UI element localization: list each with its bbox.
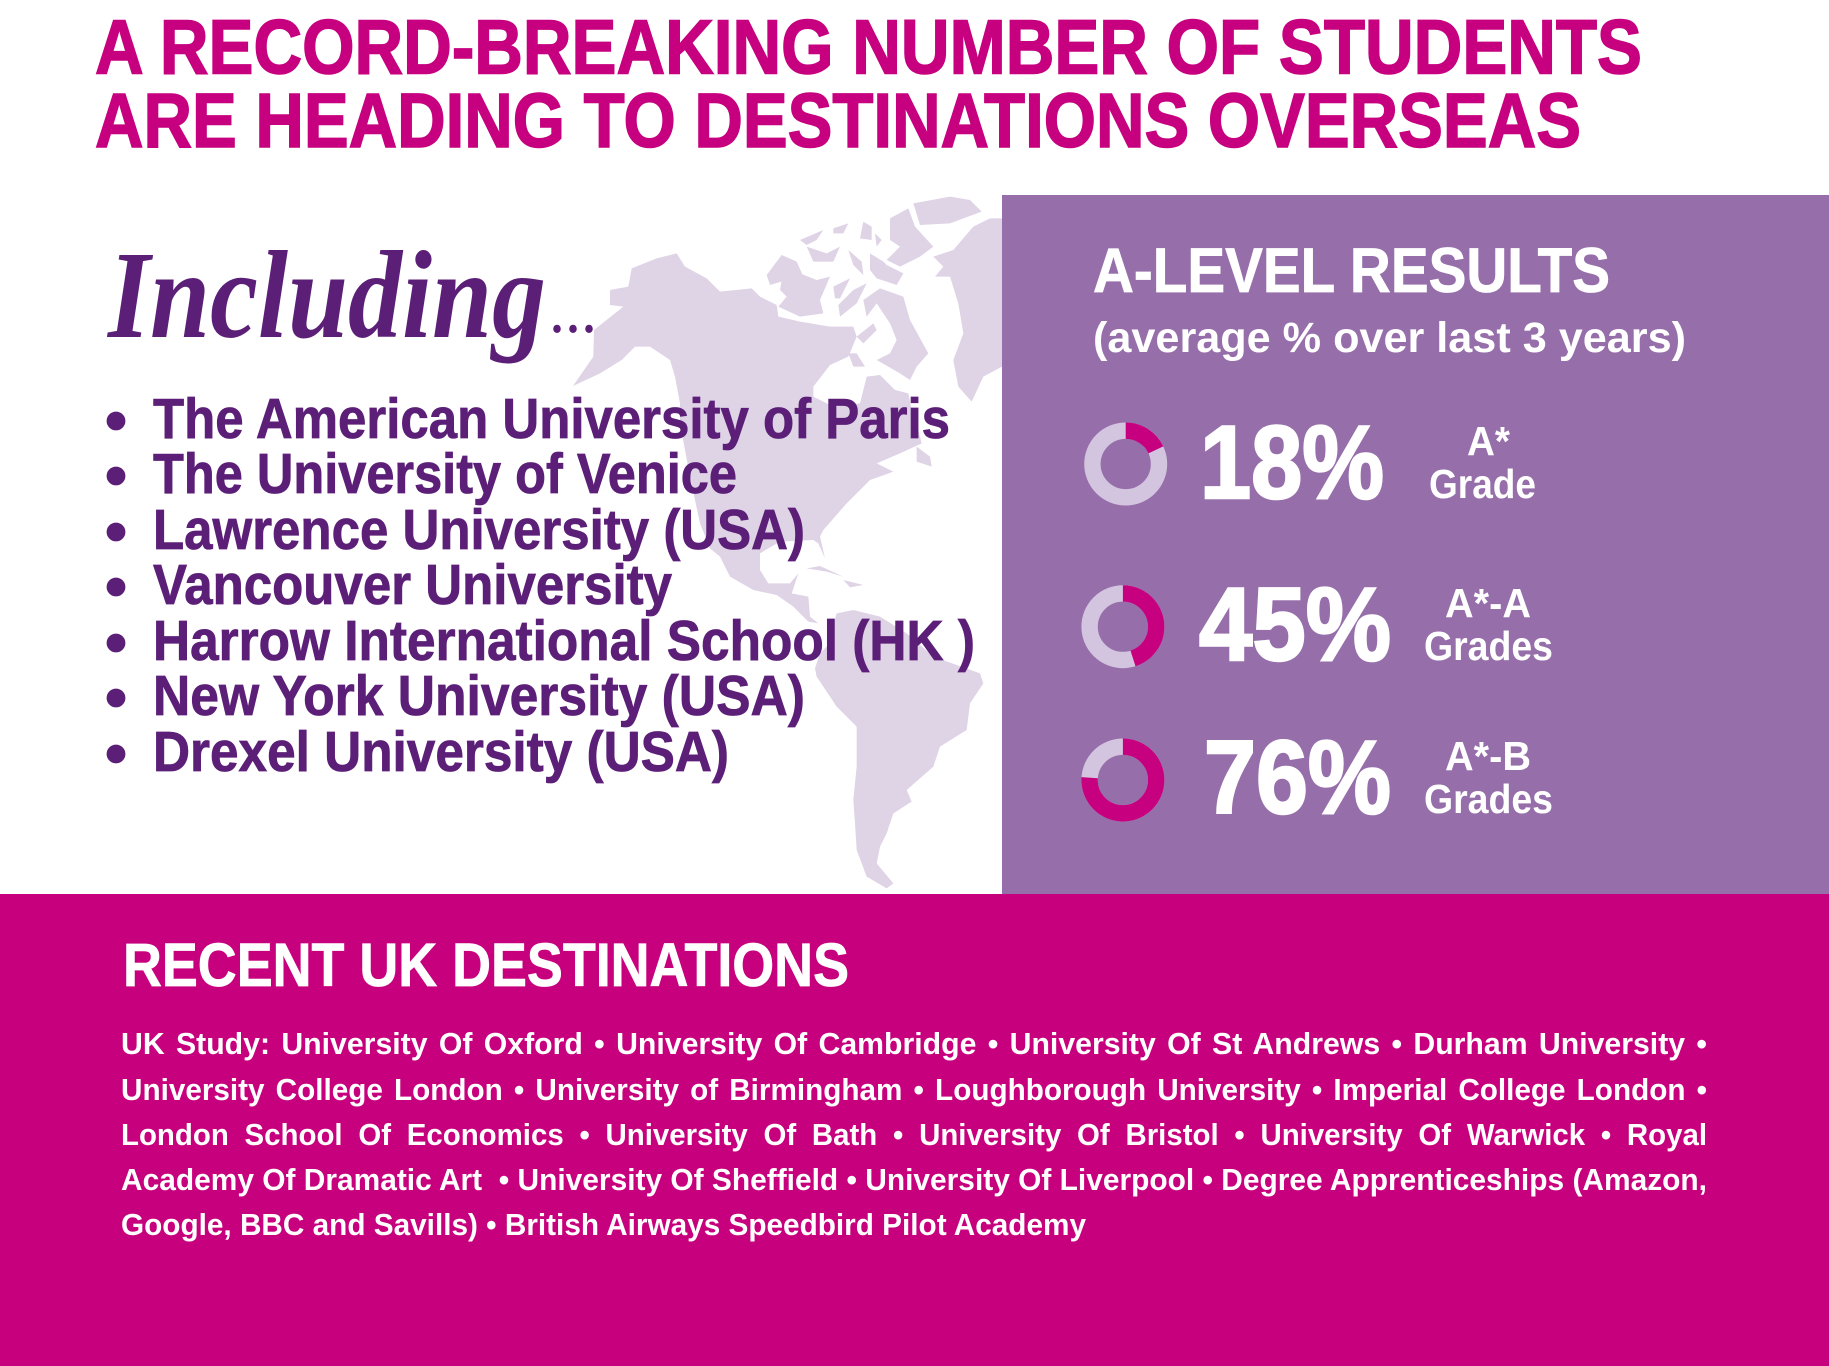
text block: UK destinations list: [121, 1026, 1707, 1242]
stat: 76% A*-B grades: Grades: [1424, 776, 1553, 822]
heading: recent UK destinations: RECENT UK DESTINATIONS: [123, 931, 849, 999]
panel: A-level results: [1002, 195, 1829, 894]
text block: UK destinations list: University College London • University of Birmingham • Loughborough University • Imperial College London •: [121, 1072, 1707, 1107]
stat: 76% A*-B grades: [1204, 720, 1553, 836]
list: overseas universities: Drexel University (USA): [153, 720, 729, 784]
title: A RECORD-BREAKING NUMBER OF STUDENTS: [95, 4, 1642, 90]
stat: 18% A* grade: A*: [1467, 418, 1510, 464]
stat: 18% A* grade: 18%: [1200, 405, 1384, 521]
heading: A-level results: (average % over last 3 years): [1093, 314, 1686, 362]
heading: Including: ...: [549, 271, 597, 348]
stat: 45% A*-A grades: 45%: [1199, 567, 1391, 683]
text block: UK destinations list: Google, BBC and Savills) • British Airways Speedbird Pilot Academy: [121, 1207, 1087, 1242]
title: ARE HEADING TO DESTINATIONS OVERSEAS: [95, 78, 1581, 164]
text block: UK destinations list: Academy Of Dramatic Art • University Of Sheffield • University Of Liverpool • Degree Apprenticeships (Amazon,: [121, 1162, 1707, 1197]
list: overseas universities: [107, 387, 975, 784]
stat: 76% A*-B grades: 76%: [1204, 720, 1391, 836]
stat: 18% A* grade: [1200, 405, 1536, 521]
donut: 18%: [1092, 431, 1159, 497]
heading: A-level results: A-LEVEL RESULTS: [1093, 236, 1610, 306]
stat: 76% A*-B grades: A*-B: [1445, 733, 1531, 779]
donut: 76%: [1090, 747, 1156, 813]
stat: 45% A*-A grades: Grades: [1424, 623, 1553, 669]
list: overseas universities: Harrow International School (HK ): [153, 609, 975, 673]
text block: UK destinations list: London School Of Economics • University Of Bath • University Of Bristol • University Of Warwick • Royal: [121, 1117, 1707, 1152]
list: overseas universities: The American University of Paris: [153, 387, 950, 451]
stat: 45% A*-A grades: [1199, 567, 1553, 683]
donut: 45%: [1090, 593, 1156, 660]
title: [95, 4, 1642, 164]
text block: UK destinations list: UK Study: University Of Oxford • University Of Cambridge • University Of St Andrews • Durham University •: [121, 1026, 1707, 1061]
heading: A-level results: [1093, 236, 1686, 362]
list: overseas universities: Vancouver University: [153, 553, 672, 617]
list: overseas universities: The University of Venice: [153, 442, 737, 506]
list: overseas universities: New York University (USA): [153, 664, 805, 728]
world map: the Americas: [573, 197, 1005, 888]
heading: Including: Including: [106, 227, 546, 365]
panel: recent UK destinations: [0, 894, 1829, 1366]
stat: 45% A*-A grades: A*-A: [1445, 580, 1531, 626]
list: overseas universities: Lawrence University (USA): [153, 498, 805, 562]
stat: 18% A* grade: Grade: [1429, 461, 1536, 507]
